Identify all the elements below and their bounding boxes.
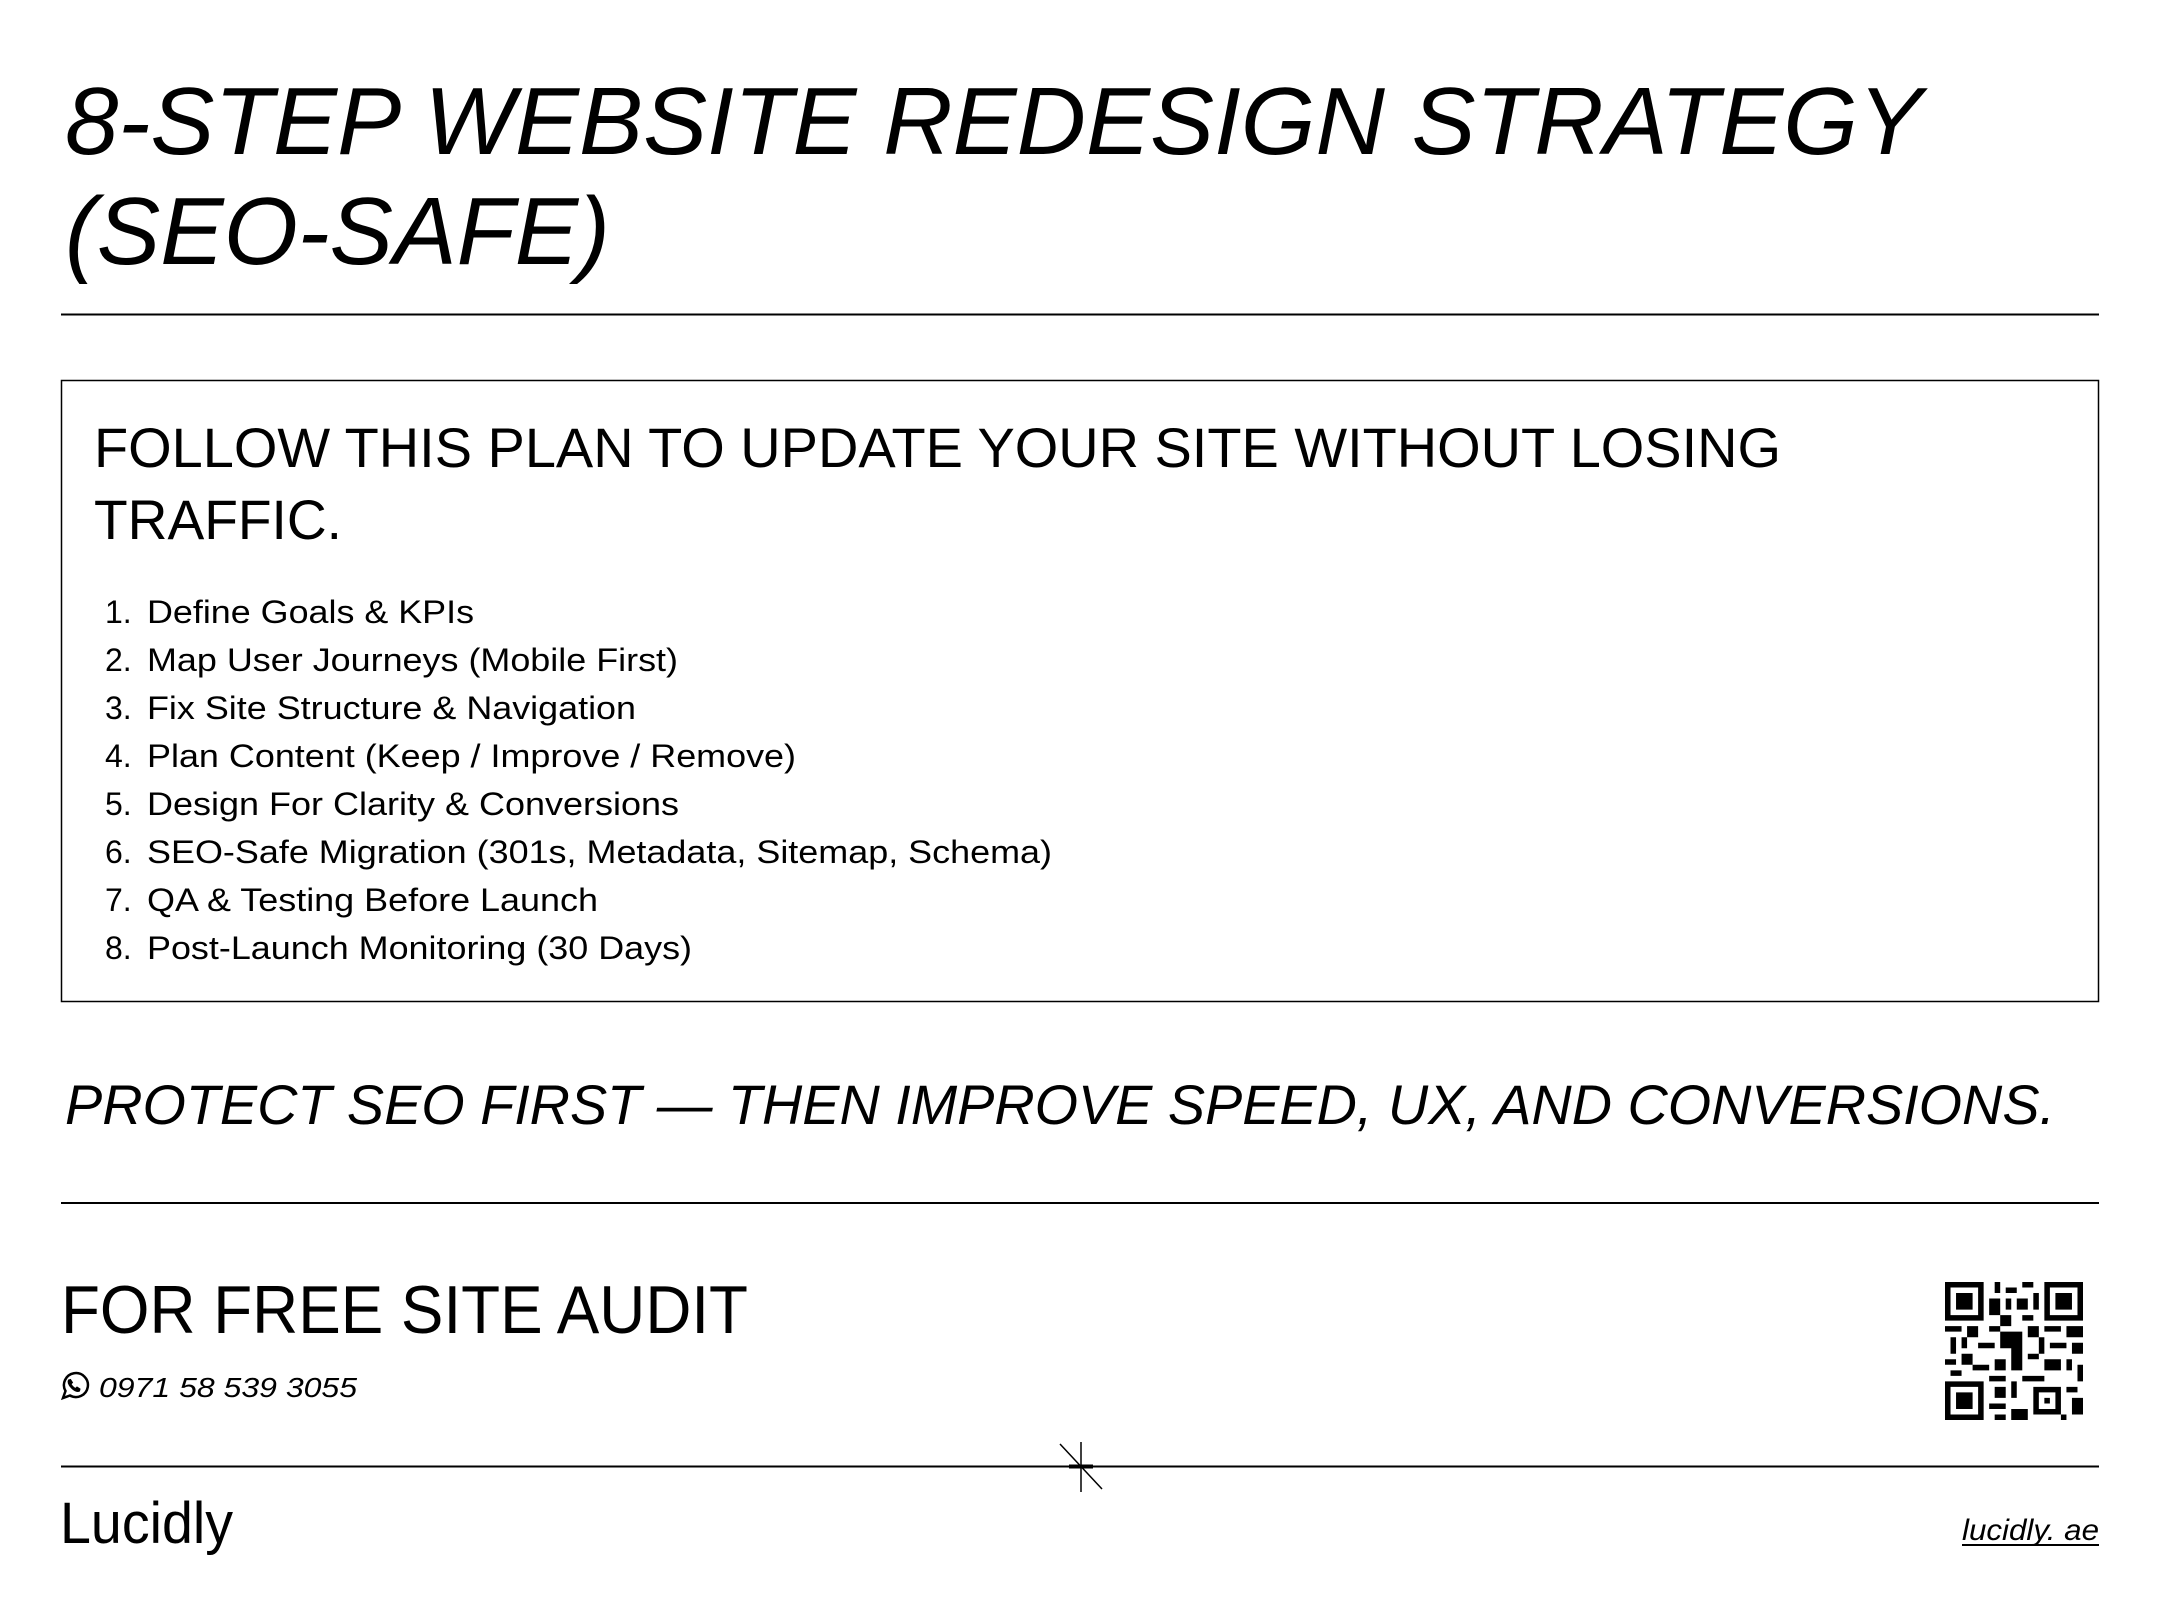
step list: 7. xyxy=(105,882,132,918)
step list: 6. xyxy=(105,834,132,870)
logo: Lucidly: Lucidly xyxy=(60,1491,233,1556)
step list: 3. xyxy=(105,690,132,726)
panel: plan box xyxy=(62,380,2098,1002)
step list: 4. xyxy=(105,738,132,774)
step list: Define Goals & KPIs xyxy=(147,594,474,630)
step list: Design For Clarity & Conversions xyxy=(147,786,679,822)
subheading: TRAFFIC. xyxy=(94,488,342,551)
qr code xyxy=(1945,1282,2083,1420)
subheading xyxy=(94,416,1781,551)
step list xyxy=(105,594,1052,966)
step list: Fix Site Structure & Navigation xyxy=(147,690,636,726)
step list: Post-Launch Monitoring (30 Days) xyxy=(147,930,692,966)
icon: whatsapp xyxy=(63,1373,88,1398)
step list: Map User Journeys (Mobile First) xyxy=(147,642,678,678)
tagline: PROTECT SEO FIRST — THEN IMPROVE SPEED, UX, AND CONVERSIONS. xyxy=(65,1073,2055,1136)
icon: cross mark xyxy=(1060,1442,1102,1492)
title xyxy=(65,68,1928,285)
step list: QA & Testing Before Launch xyxy=(147,882,598,918)
step list: 2. xyxy=(105,642,132,678)
title: (SEO-SAFE) xyxy=(65,178,610,285)
step list: 5. xyxy=(105,786,132,822)
step list: Plan Content (Keep / Improve / Remove) xyxy=(147,738,796,774)
phone contact: 0971 58 539 3055 xyxy=(99,1372,357,1403)
cta heading: FOR FREE SITE AUDIT xyxy=(61,1272,748,1348)
step list: 8. xyxy=(105,930,132,966)
step list: SEO-Safe Migration (301s, Metadata, Sitemap, Schema) xyxy=(147,834,1052,870)
website link: lucidly. ae xyxy=(1962,1514,2099,1547)
subheading: FOLLOW THIS PLAN TO UPDATE YOUR SITE WITHOUT LOSING xyxy=(94,416,1781,479)
title: 8-STEP WEBSITE REDESIGN STRATEGY xyxy=(65,68,1928,175)
step list: 1. xyxy=(105,594,132,630)
